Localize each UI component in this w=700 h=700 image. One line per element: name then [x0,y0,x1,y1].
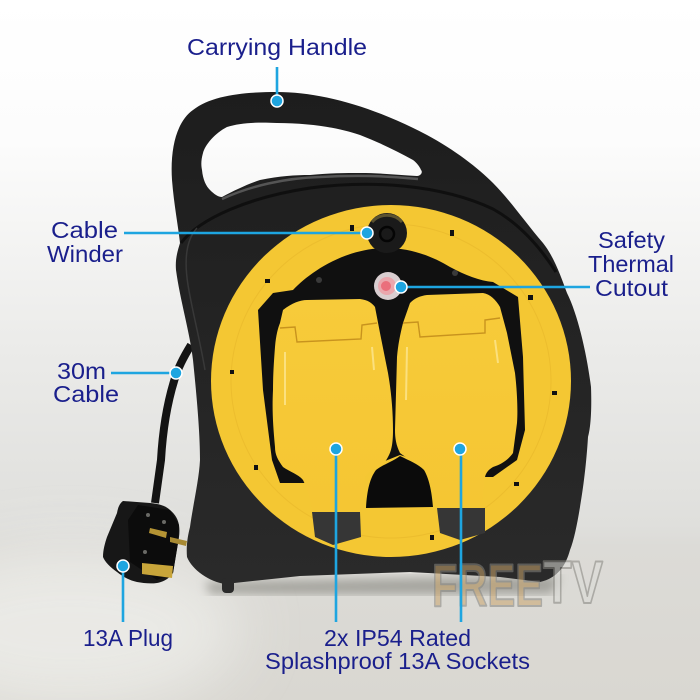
label: cable winder: Winder [47,241,123,267]
label: sockets: 2x IP54 Rated [324,625,471,651]
pin: earth [149,528,167,538]
ledge highlight [222,176,418,199]
plug [103,501,187,583]
left cover hinge [280,323,377,342]
label: cable winder: Cable [51,217,118,243]
pin: live [170,537,187,546]
left socket cover [273,299,393,510]
label: safety thermal cutout: Cutout [595,275,669,301]
cable reel [172,92,591,593]
reel body [172,92,591,584]
yellow disc [211,205,571,557]
label: 30m cable: 30m [57,358,106,384]
disc notches [230,225,557,540]
label: 30m cable [53,358,119,407]
floor shadow [205,576,560,594]
callout dots [117,95,466,572]
shell channel [181,184,556,272]
right cover hinge [403,318,500,337]
left rubber seal [312,512,361,545]
label: cable winder [47,217,123,267]
floor lighter area [0,550,240,700]
label: safety thermal cutout: Thermal [588,251,674,277]
label: 13A plug: 13A Plug [83,625,173,651]
centre opening [366,456,433,508]
right cover highlights [406,340,498,400]
plug screws [143,513,166,554]
callout lines [111,67,590,622]
cable [155,345,191,503]
watermark: FREE [432,552,543,619]
disc inner ring [231,224,551,538]
pin: neutral [142,563,173,578]
winder knob [367,213,407,253]
label: 30m cable: Cable [53,381,119,407]
label: safety thermal cutout: Safety [598,227,665,253]
label: sockets [265,625,530,674]
plate screws [316,270,458,283]
disc black plate [258,248,525,483]
foot [222,578,234,593]
label: safety thermal cutout [588,227,674,301]
shell inner highlight [186,228,205,370]
thermal cutout button [374,272,402,300]
right socket cover [395,293,517,505]
label: carrying handle: Carrying Handle [187,34,367,60]
plug face [128,505,179,580]
label: sockets: Splashproof 13A Sockets [265,648,530,674]
right rubber seal [437,508,485,540]
left cover highlights [285,347,374,405]
watermark: TV [543,549,603,616]
